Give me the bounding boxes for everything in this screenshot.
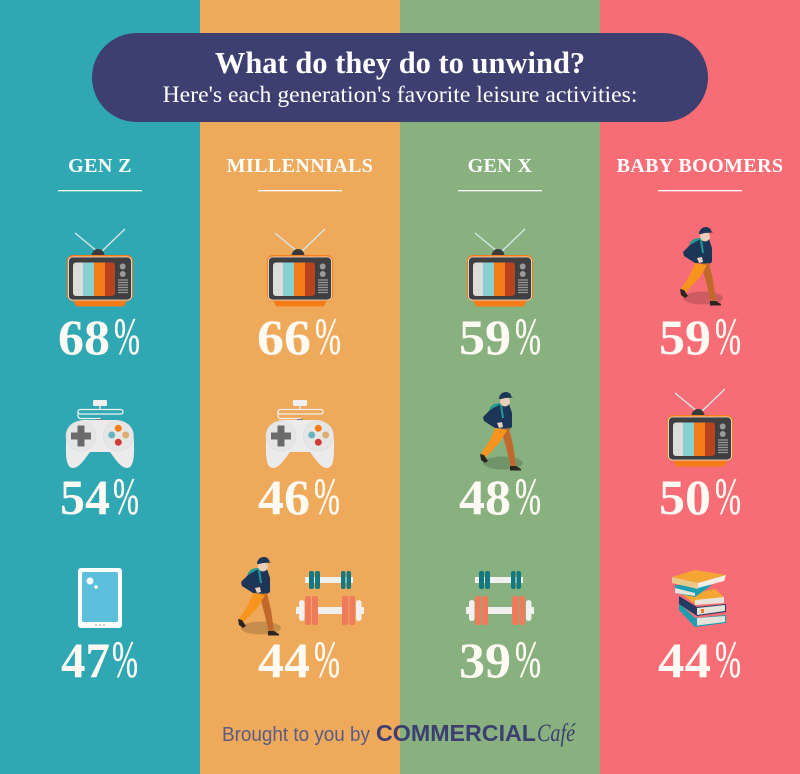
stat: exercise 39% xyxy=(459,632,541,689)
stat: reading 44% xyxy=(658,632,741,689)
background column: Baby Boomers xyxy=(600,0,800,774)
heading: Gen X: GEN X xyxy=(468,155,533,177)
footer credit xyxy=(222,720,576,747)
background column: Gen Z xyxy=(0,0,200,774)
title: What do they do to unwind? xyxy=(215,46,585,80)
stat: walking 59%: % xyxy=(715,309,741,366)
stat: television 68% xyxy=(58,309,140,366)
stat: television 68%: % xyxy=(114,309,140,366)
stat: exercise 39%: 39 xyxy=(459,632,511,688)
stat: walking 48%: % xyxy=(515,469,541,526)
icon: walker xyxy=(238,557,281,636)
heading: Millennials: MILLENNIALS xyxy=(227,155,373,177)
icon: television xyxy=(667,389,733,466)
title banner xyxy=(92,33,708,122)
stat: walking 48% xyxy=(459,469,541,526)
stat: video games 54%: % xyxy=(113,469,139,526)
stat: video games 46%: 46 xyxy=(258,469,310,525)
heading: Gen Z xyxy=(58,155,142,191)
stat: video games 46% xyxy=(258,469,340,526)
footer credit: COMMERCIAL xyxy=(376,720,536,746)
stat: exercise 39%: % xyxy=(515,632,541,689)
stat: walking 48%: 48 xyxy=(459,469,511,525)
icon: television xyxy=(267,229,333,306)
stat: walking and exercise 44% xyxy=(258,632,340,689)
icon: game controller xyxy=(66,400,134,468)
stat: reading 44%: 44 xyxy=(658,632,711,688)
stat: reading 44%: % xyxy=(715,632,741,689)
icon: television xyxy=(467,229,533,306)
stat: television 59%: 59 xyxy=(459,309,511,365)
stat: tablet 47%: 47 xyxy=(61,632,110,688)
stat: television 50% xyxy=(659,469,741,526)
stat: tablet 47% xyxy=(61,632,138,689)
icon: television xyxy=(67,229,133,306)
icon: walker xyxy=(680,227,723,306)
background column: Millennials xyxy=(200,0,400,774)
panel: Millennials xyxy=(227,155,373,689)
stat: tablet 47%: % xyxy=(112,632,138,689)
stat: video games 54%: 54 xyxy=(60,469,110,525)
footer credit: Café xyxy=(537,720,576,747)
subtitle: Here's each generation's favorite leisure activities: xyxy=(163,82,637,108)
icon: tablet xyxy=(78,568,122,628)
heading: Baby Boomers: BABY BOOMERS xyxy=(617,155,783,177)
panel: Baby Boomers xyxy=(617,155,783,689)
stat: video games 46%: % xyxy=(314,469,340,526)
heading: Gen X xyxy=(458,155,542,191)
stat: television 66%: 66 xyxy=(257,309,311,365)
heading: Gen Z: GEN Z xyxy=(68,155,132,177)
stat: television 66%: % xyxy=(315,309,341,366)
footer credit: Brought to you by xyxy=(222,724,370,746)
stat: walking and exercise 44%: 44 xyxy=(258,632,310,688)
stat: television 66% xyxy=(257,309,341,366)
stat: walking and exercise 44%: % xyxy=(314,632,340,689)
stat: walking 59%: 59 xyxy=(659,309,711,365)
stat: video games 54% xyxy=(60,469,139,526)
stat: television 50%: 50 xyxy=(659,469,711,525)
stat: television 68%: 68 xyxy=(58,309,110,365)
stat: walking 59% xyxy=(659,309,741,366)
icon: dumbbells xyxy=(466,571,534,625)
icon: game controller xyxy=(266,400,334,468)
stat: television 50%: % xyxy=(715,469,741,526)
panel: Gen Z xyxy=(58,155,142,689)
background column: Gen X xyxy=(400,0,600,774)
panel: Gen X xyxy=(458,155,542,689)
icon: books xyxy=(672,570,726,627)
stat: television 59%: % xyxy=(515,309,541,366)
icon: dumbbells xyxy=(296,571,364,625)
stat: television 59% xyxy=(459,309,541,366)
icon: walker xyxy=(480,392,523,470)
